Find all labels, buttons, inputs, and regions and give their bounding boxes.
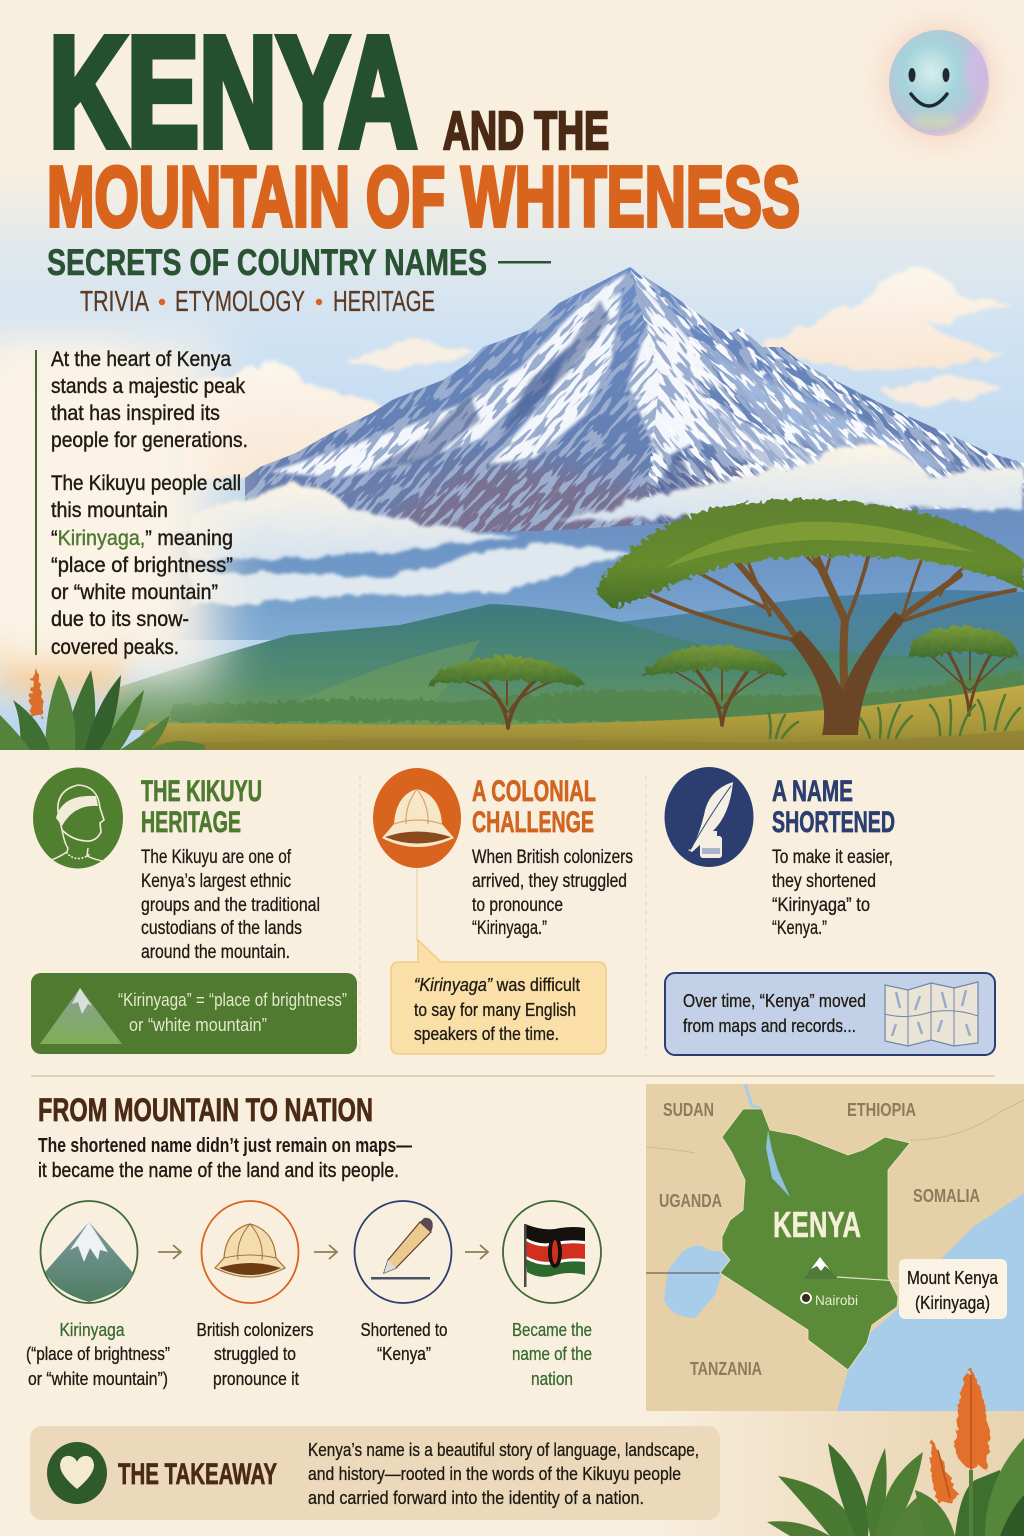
tree line xyxy=(170,670,1024,722)
intro text panel xyxy=(35,348,248,659)
icon: folded map xyxy=(885,982,978,1046)
intro text panel: “place of brightness” xyxy=(51,554,233,577)
hero landscape illustration xyxy=(0,194,1024,750)
lower blue band xyxy=(120,505,1024,640)
map labels: ETHIOPIA xyxy=(847,1100,916,1120)
heading: SHORTENED xyxy=(772,806,895,839)
icon: Kikuyu person xyxy=(33,768,123,868)
title: AND THE xyxy=(443,101,609,161)
divider xyxy=(31,1075,995,1077)
body text xyxy=(472,847,633,939)
panel: colonial challenge xyxy=(373,768,633,1054)
step: became the nation: Became the xyxy=(512,1319,592,1340)
tagline: ETYMOLOGY xyxy=(175,286,305,318)
map of Kenya: KENYA xyxy=(773,1204,861,1245)
callout: Mount Kenya label: (Kirinyaga) xyxy=(915,1292,990,1313)
intro text panel: or “white mountain” xyxy=(51,581,218,604)
section heading: from mountain to nation: FROM MOUNTAIN TO NATION xyxy=(38,1092,373,1128)
distant acacia left xyxy=(427,655,586,728)
Nairobi marker: Nairobi xyxy=(815,1292,858,1308)
rock and snow texture xyxy=(245,271,659,532)
Kenya shape xyxy=(720,1109,910,1370)
heading: THE KIKUYU xyxy=(141,775,262,808)
intro text panel: covered peaks. xyxy=(51,636,179,659)
hills xyxy=(110,604,1024,730)
icon: smiling bubble xyxy=(881,22,997,144)
icon: heart xyxy=(47,1442,107,1504)
heading: A NAME xyxy=(772,775,853,808)
icon: Mount Kenya marker xyxy=(804,1257,837,1279)
map of Kenya xyxy=(646,1084,1024,1411)
title: KENYA xyxy=(49,5,417,180)
takeaway text: Kenya’s name is a beautiful story of language, landscape, xyxy=(308,1439,699,1460)
body text: “Kirinyaga” to xyxy=(772,895,870,916)
takeaway text: and history—rooted in the words of the Kikuyu people xyxy=(308,1463,681,1484)
heading xyxy=(472,775,596,839)
body text: custodians of the lands xyxy=(141,918,302,939)
tagline xyxy=(80,286,435,318)
takeaway panel xyxy=(30,1426,720,1520)
callout: meaning: or “white mountain” xyxy=(129,1015,267,1035)
callout: Mount Kenya label: Mount Kenya xyxy=(907,1267,999,1288)
intro text panel: stands a majestic peak xyxy=(51,375,245,398)
intro text panel: “Kirinyaga,” meaning xyxy=(51,527,233,550)
step: became the nation xyxy=(503,1201,601,1389)
left foreground plant xyxy=(0,668,205,750)
subtitle: SECRETS OF COUNTRY NAMES xyxy=(47,242,487,283)
main snow fields xyxy=(270,272,860,478)
low clouds xyxy=(190,444,1024,560)
callout: maps and records xyxy=(665,973,995,1055)
step: British colonizers: pronounce it xyxy=(213,1368,299,1389)
section intro text: The shortened name didn’t just remain on maps— xyxy=(38,1135,412,1157)
body text: To make it easier, xyxy=(772,847,893,868)
map labels: SUDAN xyxy=(663,1100,714,1120)
Lake Victoria xyxy=(664,1245,730,1318)
heading: CHALLENGE xyxy=(472,806,594,839)
step: became the nation: name of the xyxy=(512,1343,592,1364)
title xyxy=(47,5,800,245)
small flower spike xyxy=(930,1438,959,1503)
ridge shading xyxy=(370,300,700,540)
step: British colonizers: British colonizers xyxy=(196,1319,314,1340)
body text: “Kenya.” xyxy=(772,918,827,939)
map labels xyxy=(659,1100,980,1379)
callout: meaning: “Kirinyaga” = “place of brightness” xyxy=(118,990,347,1010)
intro text panel: At the heart of Kenya xyxy=(51,348,231,371)
body text xyxy=(772,847,893,939)
body text: The Kikuyu are one of xyxy=(141,847,292,868)
callout: meaning xyxy=(31,973,357,1054)
intro text panel: this mountain xyxy=(51,499,168,522)
map labels: TANZANIA xyxy=(690,1359,762,1379)
body text: around the mountain. xyxy=(141,942,290,963)
heading: A COLONIAL xyxy=(472,775,596,808)
callout: difficult name xyxy=(391,940,606,1054)
leaves xyxy=(767,1438,1024,1536)
bottom right plant xyxy=(767,1367,1024,1536)
right flank light patches xyxy=(700,345,960,470)
callout: maps and records: Over time, “Kenya” moved xyxy=(683,990,866,1011)
section intro text xyxy=(38,1135,412,1182)
distant acacia right xyxy=(907,626,1018,715)
icon: Kenyan flag xyxy=(524,1224,585,1287)
heading xyxy=(141,775,262,839)
column dividers xyxy=(360,775,646,1055)
grass xyxy=(130,685,1024,750)
body text: When British colonizers xyxy=(472,847,633,868)
intro text panel: The Kikuyu people call xyxy=(51,472,241,495)
heading xyxy=(772,775,895,839)
step: shortened to Kenya xyxy=(354,1201,452,1364)
step: Kirinyaga: Kirinyaga xyxy=(60,1319,125,1340)
section intro text: it became the name of the land and its people. xyxy=(38,1160,399,1182)
tagline: TRIVIA xyxy=(80,286,149,318)
body text: Kenya’s largest ethnic xyxy=(141,871,291,892)
callout: difficult name: speakers of the time. xyxy=(414,1024,559,1044)
callout: difficult name: “Kirinyaga” was difficult xyxy=(414,975,580,995)
step: shortened to Kenya: “Kenya” xyxy=(377,1343,431,1364)
step: British colonizers: struggled to xyxy=(214,1343,296,1364)
step: shortened to Kenya: Shortened to xyxy=(360,1319,448,1340)
large flower spike xyxy=(954,1367,990,1472)
body text: “Kirinyaga.” xyxy=(472,918,547,939)
country borders xyxy=(646,1100,1024,1153)
callout: maps and records: from maps and records... xyxy=(683,1015,856,1036)
distant ridge xyxy=(560,590,1024,700)
arrow xyxy=(465,1245,488,1259)
cream fade behind intro text xyxy=(0,340,215,685)
step: Kirinyaga: (“place of brightness” xyxy=(26,1343,170,1364)
heading: HERITAGE xyxy=(141,806,241,839)
body text: arrived, they struggled xyxy=(472,871,627,892)
panel: Kikuyu heritage xyxy=(31,768,357,1054)
grass tufts xyxy=(768,695,1020,738)
map background tan strip xyxy=(646,1411,1024,1536)
takeaway text xyxy=(308,1439,699,1508)
Lake Turkana xyxy=(766,1130,790,1197)
step: became the nation: nation xyxy=(531,1368,573,1389)
map labels: UGANDA xyxy=(659,1191,722,1211)
distant acacia middle xyxy=(642,645,788,725)
callout: difficult name: to say for many English xyxy=(414,1000,576,1020)
body text xyxy=(141,847,320,963)
arrow xyxy=(158,1245,181,1259)
takeaway heading: THE TAKEAWAY xyxy=(118,1458,277,1491)
body text: they shortened xyxy=(772,871,876,892)
sea xyxy=(837,1193,1024,1411)
mist band xyxy=(190,543,630,606)
icon: quill and ink xyxy=(664,767,754,867)
step: Kirinyaga: or “white mountain”) xyxy=(28,1368,168,1389)
takeaway text: and carried forward into the identity of a nation. xyxy=(308,1487,644,1508)
intro text panel: people for generations. xyxy=(51,429,248,452)
high clouds xyxy=(180,268,1012,480)
step: British colonizers xyxy=(196,1201,314,1389)
arrow xyxy=(314,1245,337,1259)
panel: name shortened xyxy=(664,767,995,1055)
Mount Kenya xyxy=(245,267,1024,532)
callout: Mount Kenya label xyxy=(899,1259,1007,1319)
connector line xyxy=(416,868,418,942)
large acacia tree xyxy=(595,499,1024,735)
icon: pith helmet xyxy=(373,768,461,868)
body text: to pronounce xyxy=(472,895,563,916)
tagline: HERITAGE xyxy=(333,286,435,318)
step: Kirinyaga xyxy=(26,1201,170,1389)
intro text panel: that has inspired its xyxy=(51,402,220,425)
lower purple shadow xyxy=(392,458,756,532)
map labels: SOMALIA xyxy=(913,1186,980,1206)
body text: groups and the traditional xyxy=(141,895,320,916)
intro text panel: due to its snow- xyxy=(51,608,189,631)
